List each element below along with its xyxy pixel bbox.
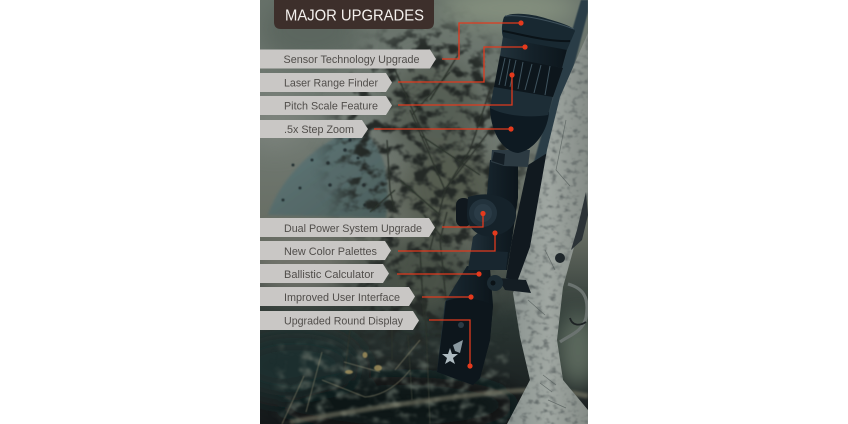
cactus pad	[268, 128, 388, 218]
rifle barrel and rail	[506, 0, 588, 292]
callout lines	[374, 23, 525, 366]
infographic	[260, 0, 588, 424]
label: Sensor Technology Upgrade	[260, 50, 436, 68]
scope tube	[468, 160, 518, 270]
label: Improved User Interface: Improved User Interface	[284, 292, 400, 304]
rifle scope	[437, 14, 575, 385]
scope body	[500, 36, 568, 68]
callout dots	[467, 20, 528, 369]
title	[274, 0, 434, 29]
label: Ballistic Calculator: Ballistic Calculator	[284, 269, 374, 281]
title: MAJOR UPGRADES	[285, 8, 424, 24]
zoom ring	[494, 55, 563, 97]
scope ring	[491, 150, 530, 167]
label: Dual Power System Upgrade: Dual Power System Upgrade	[284, 223, 422, 235]
label: Upgraded Round Display: Upgraded Round Display	[284, 316, 403, 328]
background foliage	[260, 0, 588, 424]
label: New Color Palettes: New Color Palettes	[284, 246, 377, 258]
grip band	[490, 86, 553, 116]
label: Laser Range Finder: Laser Range Finder	[284, 78, 378, 90]
label: Pitch Scale Feature	[260, 96, 392, 115]
stock texture	[528, 120, 570, 408]
label: Improved User Interface	[260, 287, 415, 306]
label: .5x Step Zoom: .5x Step Zoom	[284, 124, 354, 136]
rifle stock	[500, 30, 588, 424]
label: Laser Range Finder	[260, 73, 392, 92]
label: Dual Power System Upgrade	[260, 218, 435, 237]
ground grass	[282, 340, 420, 424]
front cone	[490, 106, 549, 153]
photo background	[260, 0, 588, 424]
label: Upgraded Round Display	[260, 311, 419, 330]
bush branches	[345, 55, 490, 424]
star logo	[442, 348, 458, 364]
trigger guard	[560, 284, 587, 342]
eyepiece	[502, 14, 575, 50]
adapter rail	[468, 250, 508, 270]
label: Pitch Scale Feature: Pitch Scale Feature	[284, 100, 378, 112]
label: Ballistic Calculator	[260, 264, 389, 283]
label: New Color Palettes	[260, 241, 391, 260]
label: Sensor Technology Upgrade: Sensor Technology Upgrade	[284, 54, 420, 66]
objective bell	[438, 266, 493, 362]
turret	[456, 194, 516, 236]
bolt handle	[487, 275, 531, 293]
label: .5x Step Zoom	[260, 120, 368, 138]
ground highlights	[276, 341, 510, 424]
foliage texture	[321, 20, 536, 336]
